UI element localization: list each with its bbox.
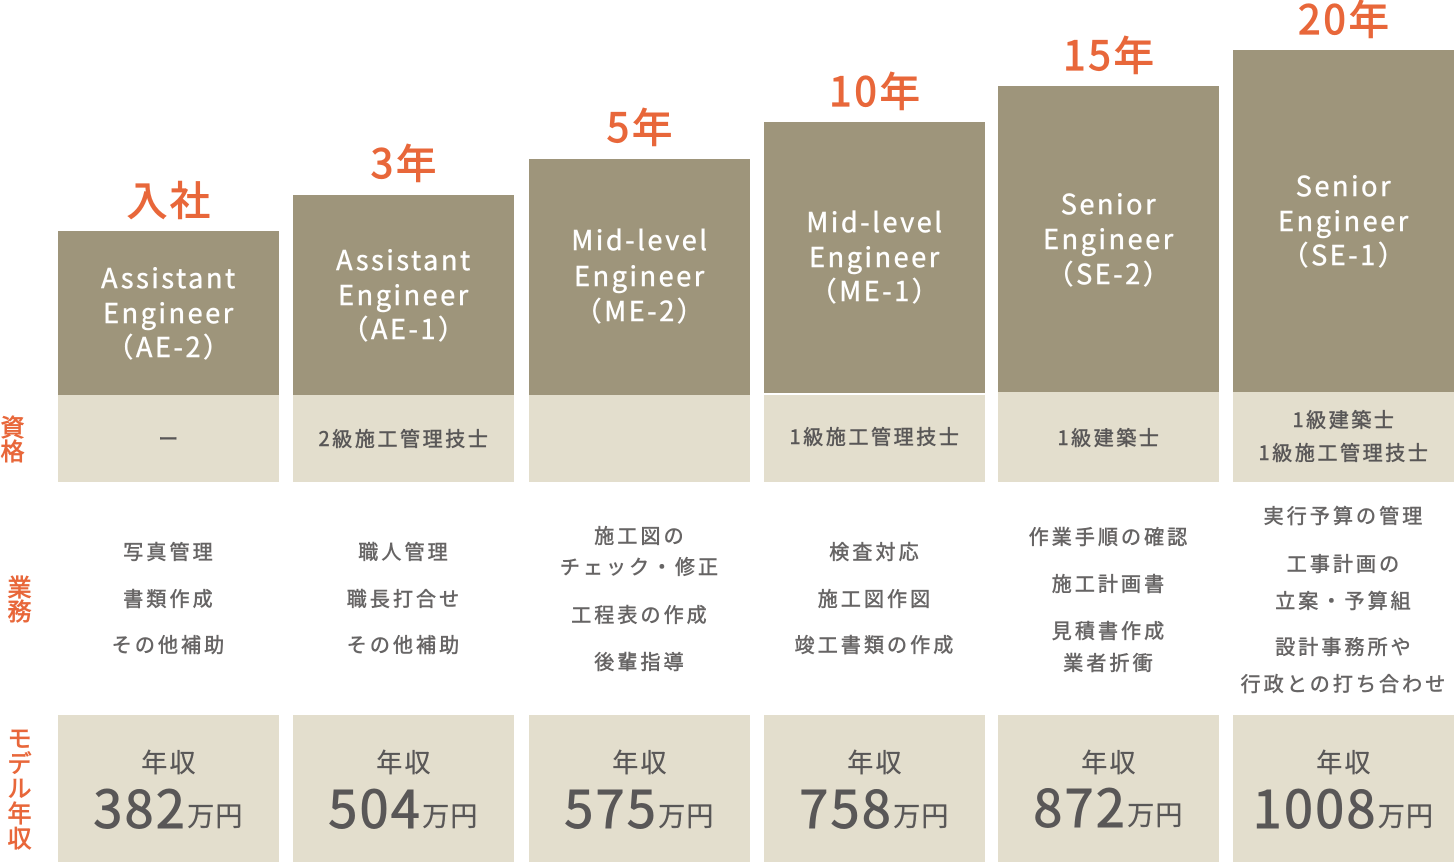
duties: 竣工書類の作成 — [795, 629, 956, 658]
qualification panel — [58, 395, 279, 482]
column: entry — [58, 169, 279, 862]
duties: 写真管理 — [123, 536, 216, 565]
grade name: Engineer — [338, 274, 471, 313]
year heading: 15年 — [1063, 24, 1157, 82]
salary value: 575万円 — [564, 768, 715, 843]
column: 3 years — [293, 132, 514, 862]
duties: 職人管理 — [358, 536, 451, 565]
duties — [795, 536, 956, 658]
salary label: 年収 — [376, 743, 433, 780]
salary panel — [764, 715, 985, 862]
grade panel — [998, 86, 1219, 392]
qualification text: 1級施工管理技士 — [1259, 437, 1430, 466]
grade name: （ME-1） — [810, 270, 941, 309]
duties: 職長打合せ — [347, 583, 462, 612]
salary value: 504万円 — [328, 768, 479, 843]
grade name: （AE-2） — [106, 326, 233, 365]
salary label: 年収 — [1081, 743, 1138, 780]
year heading: 10年 — [829, 60, 923, 118]
row label: model annual income: 収 — [8, 819, 32, 854]
grade name — [100, 257, 238, 365]
duties: その他補助 — [347, 629, 462, 658]
salary panel — [529, 715, 750, 862]
year heading: 入社 — [127, 169, 213, 227]
qualification text: 2級施工管理技士 — [319, 423, 490, 452]
year heading: 5年 — [607, 96, 675, 154]
qualification text: ー — [158, 423, 181, 452]
grade name: Engineer — [103, 292, 236, 331]
grade panel — [1233, 50, 1454, 392]
duties: 行政との打ち合わせ — [1241, 668, 1448, 697]
row label: model annual income: モ — [8, 719, 32, 754]
column: 15 years — [998, 24, 1219, 862]
qualification panel — [764, 395, 985, 482]
qualification text: 1級建築士 — [1292, 404, 1397, 433]
duties: 実行予算の管理 — [1264, 500, 1425, 529]
duties: 見積書作成 — [1052, 615, 1167, 644]
grade name: （ME-2） — [575, 290, 706, 329]
qualification text: 1級建築士 — [1057, 422, 1162, 451]
duties: 施工計画書 — [1052, 568, 1167, 597]
salary panel — [293, 715, 514, 862]
grade name: Engineer — [1278, 200, 1411, 239]
row label: model annual income: 年 — [8, 794, 32, 829]
grade panel — [764, 122, 985, 393]
salary panel — [58, 715, 279, 862]
duties: 工程表の作成 — [571, 599, 710, 628]
grade name — [571, 219, 710, 329]
column: 20 years — [1233, 0, 1454, 862]
salary value: 872万円 — [1033, 767, 1184, 842]
duties — [112, 536, 227, 658]
qualification text: 1級施工管理技士 — [790, 421, 961, 450]
duties: 施工図作図 — [818, 583, 933, 612]
row label: duties — [8, 568, 32, 627]
row label: qualifications: 資 — [0, 408, 24, 443]
salary value: 1008万円 — [1253, 768, 1434, 843]
qualification panel — [293, 395, 514, 482]
grade name: （SE-1） — [1282, 234, 1407, 273]
duties: 業者折衝 — [1063, 647, 1156, 676]
qualification text — [1259, 404, 1430, 466]
duties: 立案・予算組 — [1275, 585, 1414, 614]
column: 5 years — [529, 96, 750, 862]
grade name: Engineer — [1043, 218, 1176, 257]
grade name — [1043, 183, 1176, 292]
duties: 施工図の — [594, 520, 687, 549]
grade name: Senior — [1061, 183, 1158, 222]
qualification panel — [998, 392, 1219, 482]
grade panel — [58, 231, 279, 395]
duties — [1240, 500, 1448, 697]
grade name: （AE-1） — [341, 308, 468, 347]
salary panel — [1233, 715, 1454, 862]
grade name — [1278, 165, 1411, 273]
row label: model annual income: デ — [8, 744, 32, 779]
grade name: Engineer — [809, 236, 942, 275]
duties: 検査対応 — [829, 536, 922, 565]
duties: その他補助 — [112, 629, 227, 658]
duties: 後輩指導 — [594, 646, 687, 675]
duties — [560, 520, 721, 675]
grade name: Mid-level — [806, 201, 945, 240]
duties: 作業手順の確認 — [1029, 521, 1190, 550]
row label: duties: 務 — [8, 592, 32, 627]
grade name: （SE-2） — [1047, 253, 1172, 292]
duties: 設計事務所や — [1275, 631, 1414, 660]
grade name: Mid-level — [571, 219, 710, 258]
row label: model annual income — [8, 719, 32, 854]
duties — [1029, 521, 1190, 676]
qualification panel — [1233, 392, 1454, 482]
grade name — [336, 239, 473, 347]
grade name — [806, 201, 945, 309]
salary label: 年収 — [141, 743, 198, 780]
salary label: 年収 — [847, 743, 904, 780]
grade panel — [293, 195, 514, 395]
grade name: Assistant — [336, 239, 473, 278]
salary value: 382万円 — [93, 768, 244, 843]
salary label: 年収 — [612, 743, 669, 780]
duties — [347, 536, 462, 658]
grade panel — [529, 159, 750, 395]
salary panel — [998, 715, 1219, 862]
duties: チェック・修正 — [560, 551, 721, 580]
year heading: 3年 — [371, 132, 439, 190]
grade name: Assistant — [101, 257, 238, 296]
salary label: 年収 — [1316, 743, 1373, 780]
duties: 工事計画の — [1287, 548, 1402, 577]
row label: duties: 業 — [8, 568, 32, 603]
duties: 書類作成 — [123, 583, 216, 612]
row label: qualifications — [0, 408, 24, 467]
row label: qualifications: 格 — [0, 432, 24, 467]
salary value: 758万円 — [799, 768, 950, 843]
grade name: Engineer — [574, 255, 707, 294]
grade name: Senior — [1296, 165, 1393, 204]
qualification panel — [529, 395, 750, 482]
row label: model annual income: ル — [8, 769, 32, 804]
column: 10 years — [764, 60, 985, 862]
